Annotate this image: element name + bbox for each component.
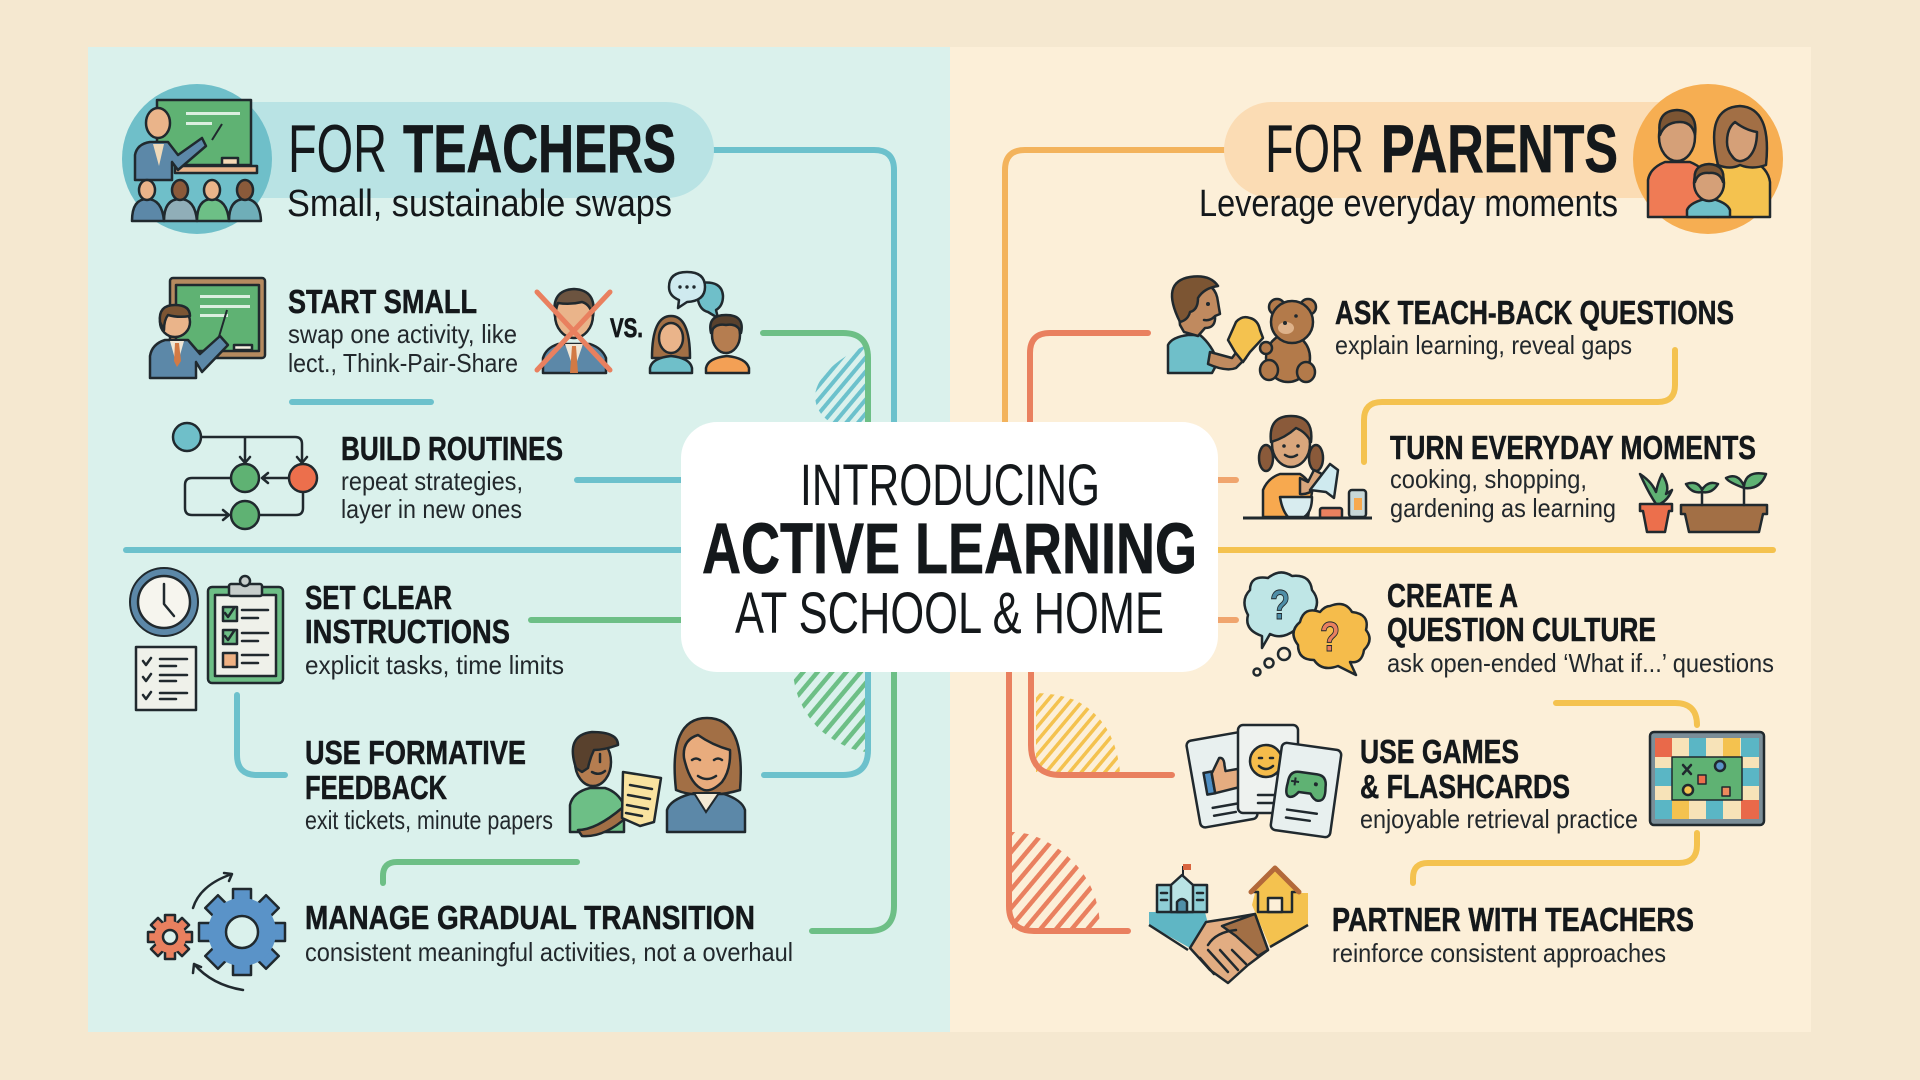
- text: use formative feedback: FEEDBACK: [305, 769, 447, 806]
- icon: teacher at board: [150, 278, 265, 378]
- text: manage gradual transition: consistent meaningful activities, not a overhaul: [305, 937, 793, 967]
- text: partner with teachers: PARTNER WITH TEACHERS: [1332, 901, 1694, 938]
- connector lines: parents: [1005, 150, 1773, 931]
- item: partner with teachers: [1149, 864, 1694, 983]
- heading: for teachers: TEACHERS: [403, 111, 676, 187]
- heading: for teachers: [288, 111, 676, 187]
- subheading: parents: Leverage everyday moments: [1199, 183, 1618, 225]
- text: build routines: repeat strategies,: [341, 466, 523, 496]
- icon: family: [1648, 106, 1770, 217]
- text: use games and flashcards: enjoyable retrieval practice: [1360, 804, 1638, 834]
- text: set clear instructions: explicit tasks, time limits: [305, 650, 564, 680]
- title line: active learning: ACTIVE LEARNING: [702, 510, 1197, 589]
- item: start small: [150, 272, 749, 378]
- label: vs.: VS.: [610, 313, 643, 343]
- text: start small: [288, 283, 518, 378]
- text: turn everyday moments: [1390, 429, 1756, 523]
- text: ask teach-back questions: explain learning, reveal gaps: [1335, 330, 1632, 360]
- text: use formative feedback: USE FORMATIVE: [305, 734, 526, 771]
- item: turn everyday moments: [1243, 416, 1767, 532]
- text: build routines: [341, 430, 563, 524]
- heading: for parents: FOR: [1265, 111, 1364, 187]
- text: create a question culture: CREATE A: [1387, 577, 1518, 614]
- center title card: [681, 422, 1218, 672]
- text: start small: swap one activity, like: [288, 319, 517, 349]
- text: set clear instructions: SET CLEAR: [305, 579, 452, 616]
- text: use games and flashcards: USE GAMES: [1360, 733, 1519, 770]
- text: turn everyday moments: cooking, shopping,: [1390, 464, 1587, 494]
- icon: teacher and class: [132, 100, 261, 221]
- text: build routines: BUILD ROUTINES: [341, 430, 563, 467]
- text: partner with teachers: [1332, 901, 1694, 968]
- item: set clear instructions: [130, 568, 564, 710]
- text: start small: START SMALL: [288, 283, 477, 320]
- icon: flow diagram: [173, 423, 317, 529]
- icon: board game: [1650, 732, 1764, 825]
- icon: student and teacher with paper: [570, 718, 745, 836]
- subheading: teachers: Small, sustainable swaps: [287, 183, 672, 225]
- header: for parents: [1199, 84, 1783, 234]
- heading: for teachers: FOR: [288, 111, 387, 187]
- title line: introducing: INTRODUCING: [800, 453, 1100, 518]
- icon: question bubbles: ?: [1270, 581, 1290, 628]
- icon: question bubbles: ?: [1320, 613, 1340, 660]
- icon: clock and clipboards: [130, 568, 283, 710]
- item: use games and flashcards: [1186, 725, 1764, 838]
- text: ask teach-back questions: ASK TEACH-BACK QUESTIONS: [1335, 294, 1734, 331]
- panel: for teachers: [88, 47, 950, 1032]
- text: create a question culture: [1387, 577, 1774, 678]
- text: start small: lect., Think-Pair-Share: [288, 348, 518, 378]
- icon: girl cooking: [1243, 416, 1372, 518]
- icon: gears: [148, 873, 285, 990]
- text: manage gradual transition: MANAGE GRADUAL TRANSITION: [305, 899, 755, 936]
- icon: lecturer crossed out vs. students talking: [537, 272, 749, 373]
- item: use formative feedback: [305, 718, 745, 836]
- icon: school and home handshake: [1149, 864, 1308, 983]
- text: manage gradual transition: [305, 899, 793, 967]
- item: manage gradual transition: [148, 873, 793, 990]
- icon: child with puppet and bear: [1168, 276, 1316, 382]
- text: set clear instructions: [305, 579, 564, 680]
- item: build routines: [173, 423, 563, 529]
- heading: for parents: PARENTS: [1381, 111, 1618, 187]
- heading: for parents: [1265, 111, 1618, 187]
- text: set clear instructions: INSTRUCTIONS: [305, 613, 510, 650]
- text: build routines: layer in new ones: [341, 494, 522, 524]
- panel: for parents: [950, 47, 1811, 1032]
- icon: flashcards: [1186, 725, 1342, 838]
- connector lines: teachers: [126, 150, 894, 931]
- text: create a question culture: QUESTION CULTURE: [1387, 611, 1656, 648]
- text: ask teach-back questions: [1335, 294, 1734, 360]
- item: ask teach-back questions: [1168, 276, 1734, 382]
- text: use games and flashcards: & FLASHCARDS: [1360, 768, 1570, 805]
- text: partner with teachers: reinforce consistent approaches: [1332, 938, 1666, 968]
- icon: potted plants: [1640, 473, 1767, 532]
- header: for teachers: [122, 84, 714, 234]
- icon: question bubbles: [1244, 572, 1370, 676]
- text: use formative feedback: exit tickets, minute papers: [305, 805, 553, 835]
- item: create a question culture: [1244, 572, 1774, 678]
- text: turn everyday moments: TURN EVERYDAY MOMENTS: [1390, 429, 1756, 466]
- text: create a question culture: ask open-ended ‘What if...’ questions: [1387, 648, 1774, 678]
- title line: at school and home: AT SCHOOL & HOME: [735, 581, 1164, 646]
- text: turn everyday moments: gardening as learning: [1390, 493, 1616, 523]
- text: use formative feedback: [305, 734, 553, 835]
- text: use games and flashcards: [1360, 733, 1638, 834]
